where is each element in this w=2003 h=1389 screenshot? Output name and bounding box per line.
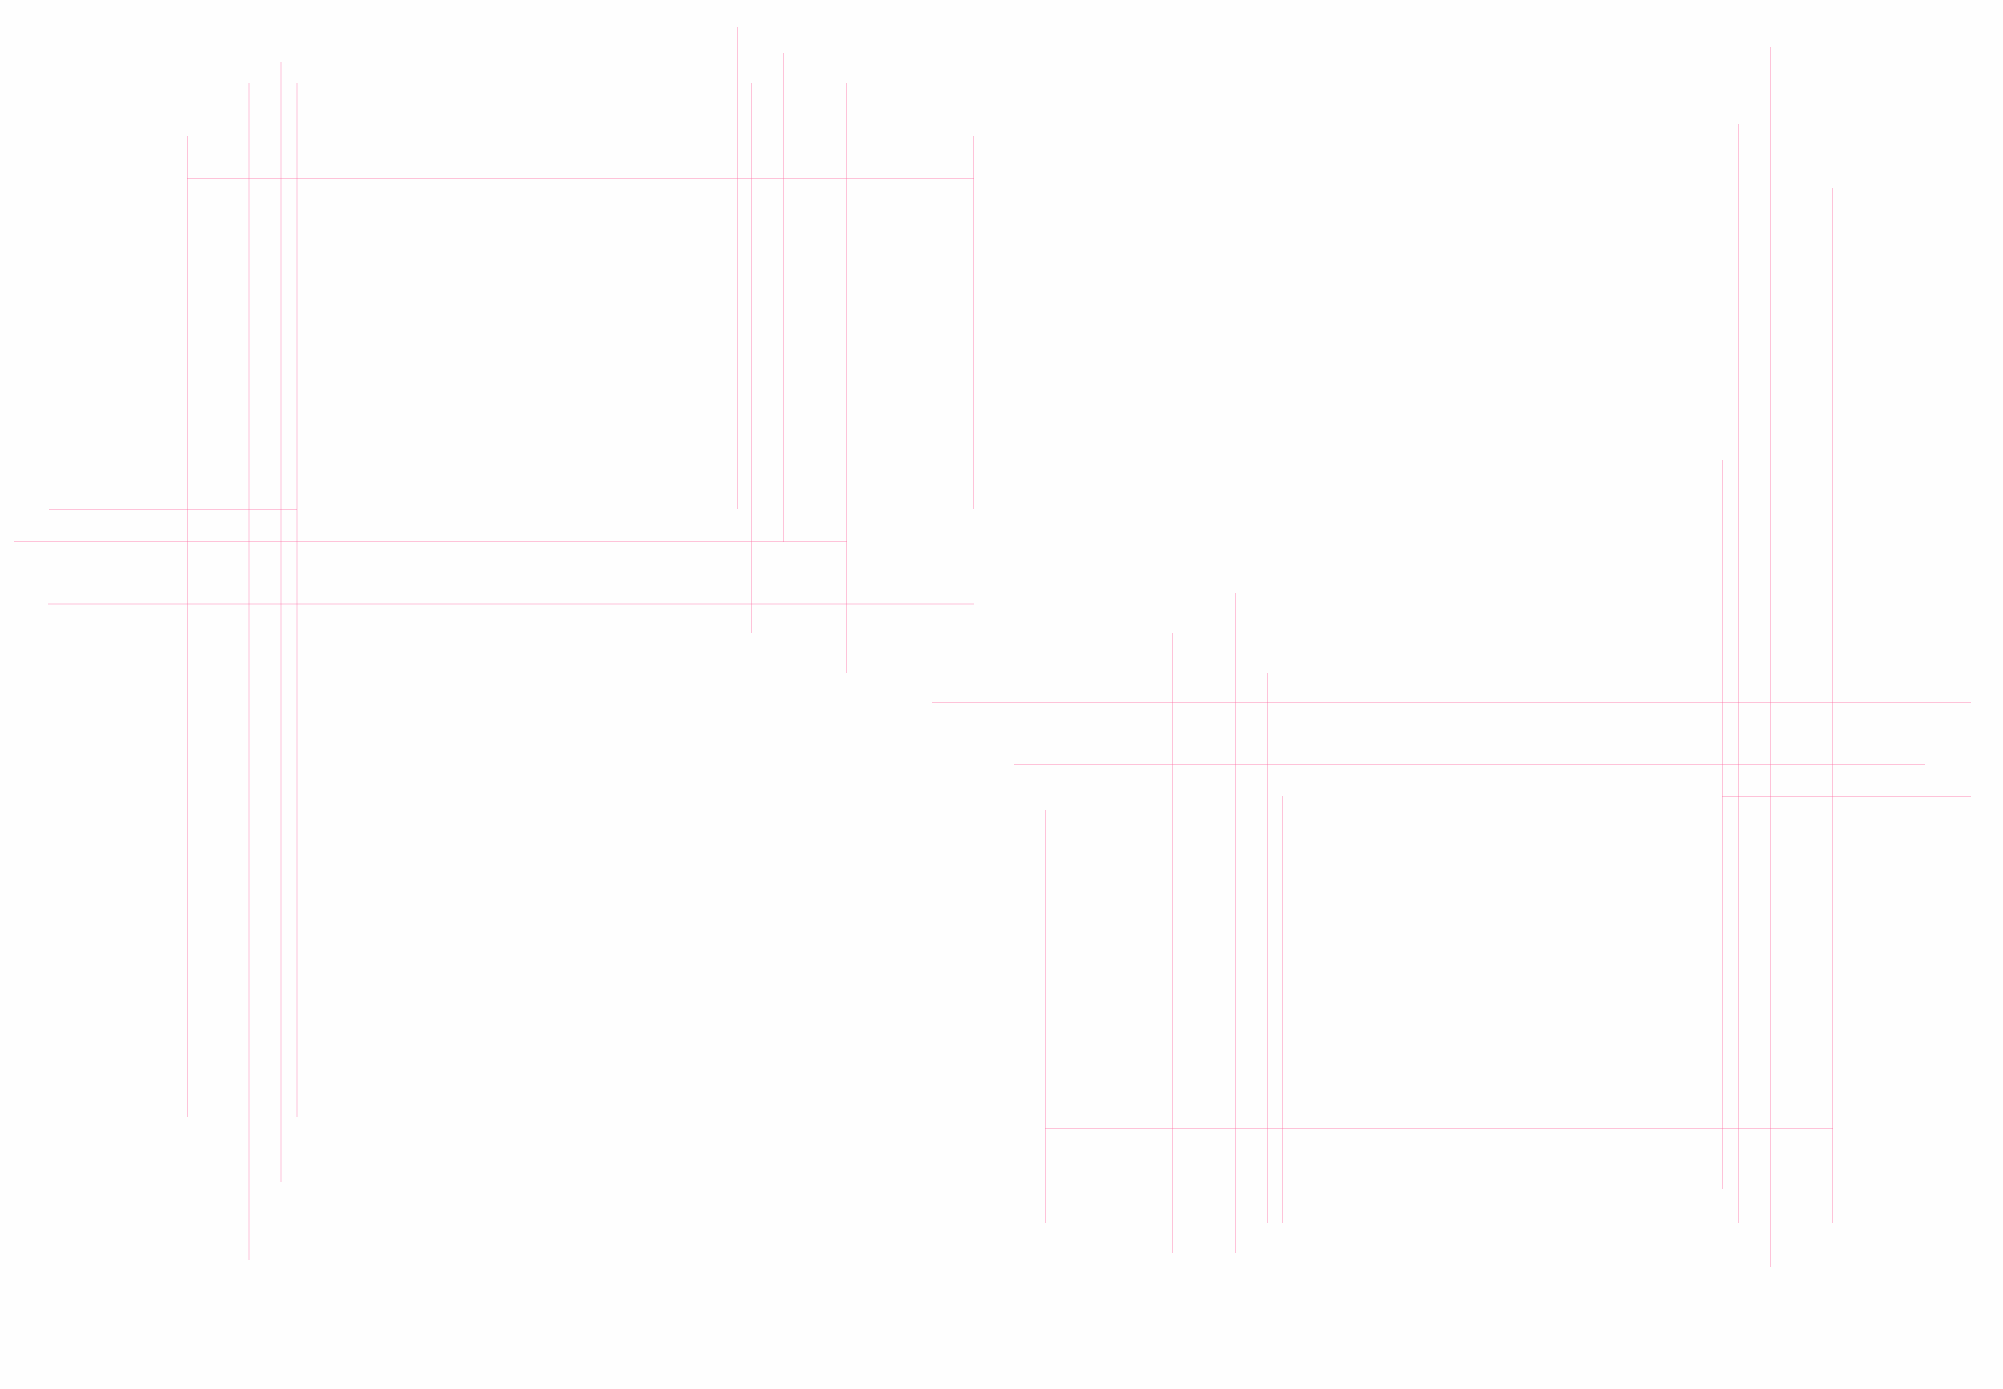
panel: lower-right line frame xyxy=(932,47,1971,1267)
panel: upper-left line frame xyxy=(14,27,974,1260)
